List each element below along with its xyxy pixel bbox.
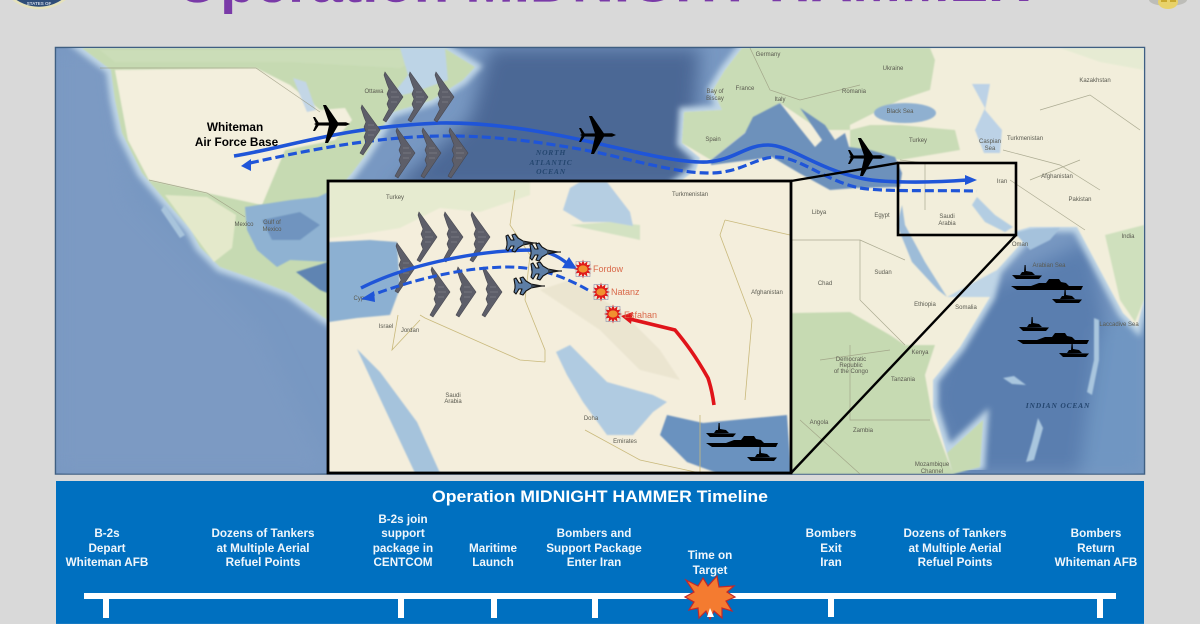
route: outbound solid blue arrow xyxy=(234,123,977,185)
map place labels: Caspian xyxy=(979,139,1001,145)
map place labels: of the Congo xyxy=(834,369,869,375)
inset place labels: Emirates xyxy=(613,439,637,445)
map place labels xyxy=(234,52,1139,475)
target: Esfahan xyxy=(604,304,657,324)
map place labels: Democratic xyxy=(836,357,866,363)
milestone: exit Iran: Bombers xyxy=(806,527,857,540)
timeline bar and tick marks xyxy=(84,593,1116,618)
label: Whiteman Air Force Base: Air Force Base xyxy=(195,135,279,149)
map place labels: Tanzania xyxy=(891,377,916,383)
milestone: tankers outbound: Refuel Points xyxy=(226,556,301,569)
map place labels: Pakistan xyxy=(1068,197,1092,203)
map place labels: Sudan xyxy=(874,270,892,276)
icon group: inset B-2 bombers xyxy=(395,212,502,317)
land base xyxy=(82,48,1144,474)
inset place labels: Turkey xyxy=(386,195,404,201)
icon: Department of Defense seal xyxy=(0,0,81,8)
target: Natanz: Natanz xyxy=(611,287,640,297)
inset place labels: Afghanistan xyxy=(751,290,783,296)
map place labels: Black Sea xyxy=(886,109,914,115)
panel: timeline xyxy=(56,481,1144,624)
map place labels: Gulf of xyxy=(263,220,281,226)
milestone: time on target: Time on xyxy=(688,549,732,562)
deep Atlantic and Indian ocean tones xyxy=(56,48,1144,474)
map place labels: Oman xyxy=(1012,242,1028,248)
inset place labels: Israel xyxy=(379,324,393,330)
map place labels: Zambia xyxy=(853,428,874,434)
map place labels: Channel xyxy=(921,469,943,475)
inset terrain and water xyxy=(329,181,791,473)
map place labels: Ottawa xyxy=(364,89,384,95)
map place labels: Arabia xyxy=(938,221,956,227)
map place labels: Romania xyxy=(842,89,867,95)
callout: Middle East locator box with connector lines xyxy=(791,163,1016,473)
map place labels: Arabian Sea xyxy=(1032,263,1066,269)
inset place labels: Saudi xyxy=(445,393,461,399)
map place labels: Republic xyxy=(839,363,863,369)
milestone: maritime launch: Maritime xyxy=(469,542,518,555)
inset place labels xyxy=(353,192,783,445)
icon group: tanker aircraft xyxy=(313,105,885,176)
map place labels: Iran xyxy=(997,179,1007,185)
map place labels: Ethiopia xyxy=(914,302,937,308)
map place labels: Afghanistan xyxy=(1041,174,1073,180)
milestone: bombers return: Bombers xyxy=(1071,527,1122,540)
milestone: tankers return: Refuel Points xyxy=(918,556,993,569)
map place labels: Mozambique xyxy=(915,462,950,468)
map place labels: Angola xyxy=(810,420,829,426)
route: inset outbound solid blue arrow xyxy=(361,250,577,288)
inset place labels: Cyprus xyxy=(353,296,373,302)
route: inset return dashed blue arrow xyxy=(361,267,588,302)
inset place labels: Arabia xyxy=(444,399,462,405)
icon group: naval ships in Arabian Sea xyxy=(1011,265,1089,357)
map place labels: Libya xyxy=(812,210,827,216)
seas and lakes xyxy=(161,48,1099,462)
milestone: join support package: support xyxy=(381,527,425,540)
map place labels: Turkmenistan xyxy=(1007,136,1043,142)
milestone: bombers return: Return xyxy=(1077,542,1115,555)
icon group: support fighters xyxy=(506,234,562,295)
inset borders xyxy=(392,190,790,472)
target: Fordow: Fordow xyxy=(593,264,624,274)
milestone: enter Iran: Bombers and xyxy=(557,527,631,540)
map place labels: Laccadive Sea xyxy=(1099,322,1139,328)
map place labels: Italy xyxy=(774,97,786,103)
map place labels: France xyxy=(736,86,755,92)
map place labels: Saudi xyxy=(939,214,955,220)
map place labels: Mexico xyxy=(234,222,254,228)
map place labels: Germany xyxy=(756,52,780,58)
milestone: tankers outbound: Dozens of Tankers xyxy=(211,527,315,540)
panel: strategic route map xyxy=(56,48,1144,475)
Europe and Turkey green xyxy=(682,48,960,160)
target: Fordow xyxy=(574,260,624,278)
map place labels: Biscay xyxy=(706,96,724,102)
milestone: join support package: package in xyxy=(373,542,433,555)
milestone: join support package: CENTCOM xyxy=(373,556,433,569)
panel: Iran strike inset map xyxy=(326,180,792,474)
Africa and India green xyxy=(791,312,953,474)
map place labels: Sea xyxy=(985,146,996,152)
map place labels: Mexico xyxy=(262,227,282,233)
inset place labels: Doha xyxy=(584,416,599,422)
map place labels: Turkey xyxy=(909,138,927,144)
icon: time on target starburst xyxy=(685,576,735,619)
icon: Department of Defense seal: STATES OF xyxy=(27,1,52,6)
target: Esfahan: Esfahan xyxy=(624,310,657,320)
timeline heading: Operation MIDNIGHT HAMMER Timeline xyxy=(432,487,768,506)
map place labels: Somalia xyxy=(955,305,977,311)
milestone: enter Iran: Support Package xyxy=(546,542,642,555)
map place labels: Kazakhstan xyxy=(1079,78,1111,84)
map place labels: Kenya xyxy=(911,350,929,356)
map place labels: INDIAN OCEAN xyxy=(1025,401,1090,410)
map place labels: NORTH xyxy=(535,148,566,157)
map place labels: ATLANTIC xyxy=(528,158,573,167)
inset place labels: Jordan xyxy=(401,328,419,334)
milestone: join support package: B-2s join xyxy=(378,513,428,526)
map place labels: Bay of xyxy=(706,89,724,95)
map place labels: Ukraine xyxy=(883,66,904,72)
milestone: tankers return: Dozens of Tankers xyxy=(903,527,1007,540)
milestone: bombers return: Whiteman AFB xyxy=(1055,556,1137,569)
icon group: B-2 bombers over Atlantic xyxy=(360,72,468,178)
country borders xyxy=(100,48,1140,474)
inset place labels: Turkmenistan xyxy=(672,192,708,198)
route: red Tomahawk missile path xyxy=(621,312,714,405)
target: Natanz xyxy=(592,282,640,302)
milestone: time on target: Target xyxy=(693,564,728,577)
map place labels: Spain xyxy=(705,137,721,143)
milestone: maritime launch: Launch xyxy=(472,556,514,569)
milestone: B-2s depart: B-2s xyxy=(94,527,120,540)
map place labels: Chad xyxy=(818,281,832,287)
milestone: B-2s depart: Depart xyxy=(88,542,126,555)
map place labels: OCEAN xyxy=(536,167,566,176)
map place labels: India xyxy=(1121,234,1135,240)
milestone: B-2s depart: Whiteman AFB xyxy=(66,556,148,569)
route: return dashed blue arrow xyxy=(241,136,977,191)
milestone: enter Iran: Enter Iran xyxy=(567,556,621,569)
milestone: exit Iran: Iran xyxy=(820,556,842,569)
continental shelf glow xyxy=(82,48,1144,470)
USA cream xyxy=(115,68,352,205)
milestone: exit Iran: Exit xyxy=(820,542,842,555)
milestone: tankers return: at Multiple Aerial xyxy=(908,542,1002,555)
map place labels: Egypt xyxy=(874,213,890,219)
milestone: tankers outbound: at Multiple Aerial xyxy=(216,542,310,555)
label: Whiteman Air Force Base: Whiteman xyxy=(207,120,263,134)
icon: joint chiefs emblem xyxy=(1149,0,1187,9)
icon group: inset naval ships xyxy=(706,423,778,461)
